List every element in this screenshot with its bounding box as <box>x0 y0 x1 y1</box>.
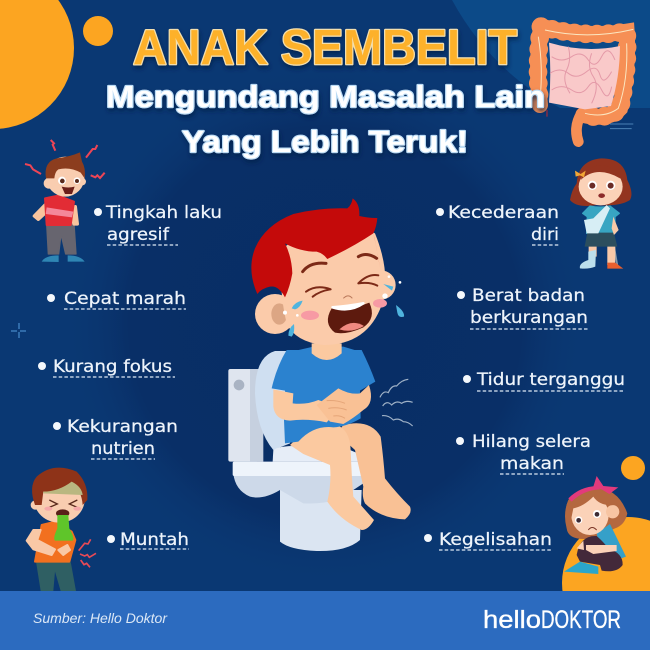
legs <box>589 245 615 265</box>
tongue <box>339 323 364 331</box>
list: right column <box>424 203 625 550</box>
nose <box>343 296 352 298</box>
sling <box>584 205 610 233</box>
flush button <box>234 380 244 390</box>
item: Kecederaan diri: diri <box>531 225 559 245</box>
eyes and mouth <box>575 510 601 530</box>
anger marks <box>25 140 105 178</box>
cheeks <box>301 311 319 320</box>
shirt <box>597 524 626 560</box>
skirt <box>585 233 617 247</box>
logo: helloDOKTOR: hello <box>483 606 541 634</box>
left ear <box>255 294 295 334</box>
main character: toilet <box>228 351 363 551</box>
item: Tidur terganggu: Tidur terganggu <box>476 370 625 390</box>
character: sad girl <box>564 476 627 574</box>
green forehead <box>43 482 83 495</box>
left arm <box>273 389 335 422</box>
collar <box>308 350 343 362</box>
item: Hilang selera makan: Hilang selera <box>472 432 591 452</box>
item: Muntah: Muntah <box>120 530 189 550</box>
hair <box>565 487 627 539</box>
face <box>571 495 609 535</box>
item: Kurang fokus: Kurang fokus <box>53 357 172 377</box>
toilet seat <box>233 462 363 476</box>
cast <box>580 250 596 269</box>
item: Tingkah laku agresif: agresif <box>107 225 170 245</box>
hair band <box>568 486 600 502</box>
item: Tingkah laku agresif: Tingkah laku <box>105 203 222 223</box>
eyebrows <box>303 255 377 272</box>
pain marks <box>79 539 96 567</box>
orange dot <box>621 456 645 480</box>
item: Tingkah laku agresif <box>94 203 222 245</box>
neck <box>312 343 342 360</box>
item: Kecederaan diri: Kecederaan <box>448 203 559 223</box>
plus sparkle <box>11 323 27 339</box>
item: Cepat marah: Cepat marah <box>64 289 186 309</box>
tank side <box>250 369 263 462</box>
source note: Sumber: Hello Doktor <box>33 611 168 626</box>
toilet lid <box>255 351 290 450</box>
right ear <box>366 270 396 300</box>
orange circle behind sad girl <box>562 517 650 649</box>
list: left column <box>38 203 222 550</box>
item: Kegelisahan: Kegelisahan <box>439 530 552 550</box>
item: Berat badan berkurangan <box>457 286 588 329</box>
item: Hilang selera makan <box>456 432 591 474</box>
shirt top <box>278 347 370 370</box>
vomit <box>54 515 73 541</box>
title line 2: Mengundang Masalah Lain <box>106 79 545 114</box>
character: vomiting boy <box>27 468 96 591</box>
shoe <box>607 263 623 269</box>
shoes <box>42 255 85 262</box>
tears <box>288 284 404 337</box>
title line 1: ANAK SEMBELIT <box>133 21 517 75</box>
arms <box>34 205 77 224</box>
tear sparkles <box>283 275 401 317</box>
legs <box>47 223 76 254</box>
item: Berat badan berkurangan: berkurangan <box>470 308 588 328</box>
closed eyes <box>306 275 378 297</box>
hair bow <box>575 171 586 177</box>
item: Berat badan berkurangan: Berat badan <box>472 286 585 306</box>
character: injured girl <box>570 158 631 269</box>
toilet bowl <box>233 473 363 503</box>
head <box>46 157 85 197</box>
hair fringe <box>566 489 615 522</box>
decorative orange circle large <box>0 0 74 129</box>
item: Kekurangan nutrien <box>53 417 178 459</box>
decorative orange circle small <box>83 16 113 46</box>
main character: boy's body <box>272 350 411 530</box>
hands <box>577 541 617 554</box>
logo: helloDOKTOR <box>483 606 621 634</box>
finger lines <box>327 401 347 418</box>
shirt <box>272 350 375 443</box>
front leg <box>290 425 374 530</box>
legs <box>577 536 623 571</box>
footer bar <box>0 591 650 650</box>
bow <box>593 476 618 494</box>
icon: intestines <box>538 27 633 142</box>
icon: stomach ache squiggles <box>380 379 413 426</box>
title <box>106 21 545 159</box>
shirt <box>35 522 75 562</box>
hair <box>251 198 380 297</box>
arm <box>612 217 619 235</box>
shirt <box>583 206 619 233</box>
character: angry boy <box>25 140 105 262</box>
toilet base <box>280 490 362 551</box>
head <box>34 476 85 523</box>
arms <box>27 530 70 555</box>
hair <box>32 468 87 505</box>
hair <box>46 152 85 178</box>
face <box>579 168 623 205</box>
logo: helloDOKTOR: DOKTOR <box>541 606 621 634</box>
eyes <box>588 181 615 198</box>
hair <box>570 158 631 206</box>
item: Hilang selera makan: makan <box>500 454 564 474</box>
face <box>44 500 81 517</box>
neck <box>313 350 340 360</box>
legs <box>36 562 76 591</box>
back leg <box>337 423 411 519</box>
main character: boy's head <box>251 198 404 370</box>
right arm and hand <box>317 385 371 424</box>
item: Kekurangan nutrien: nutrien <box>91 439 155 459</box>
shirt <box>45 196 74 225</box>
item: Kekurangan nutrien: Kekurangan <box>67 417 178 437</box>
face <box>58 177 80 194</box>
title line 3: Yang Lebih Teruk! <box>182 124 468 159</box>
teeth <box>333 303 363 309</box>
mouth <box>328 303 372 333</box>
shoes <box>564 562 598 574</box>
face <box>281 224 385 345</box>
crutch <box>608 213 617 265</box>
item: Kecederaan diri <box>436 203 560 245</box>
toilet tank <box>228 369 258 462</box>
